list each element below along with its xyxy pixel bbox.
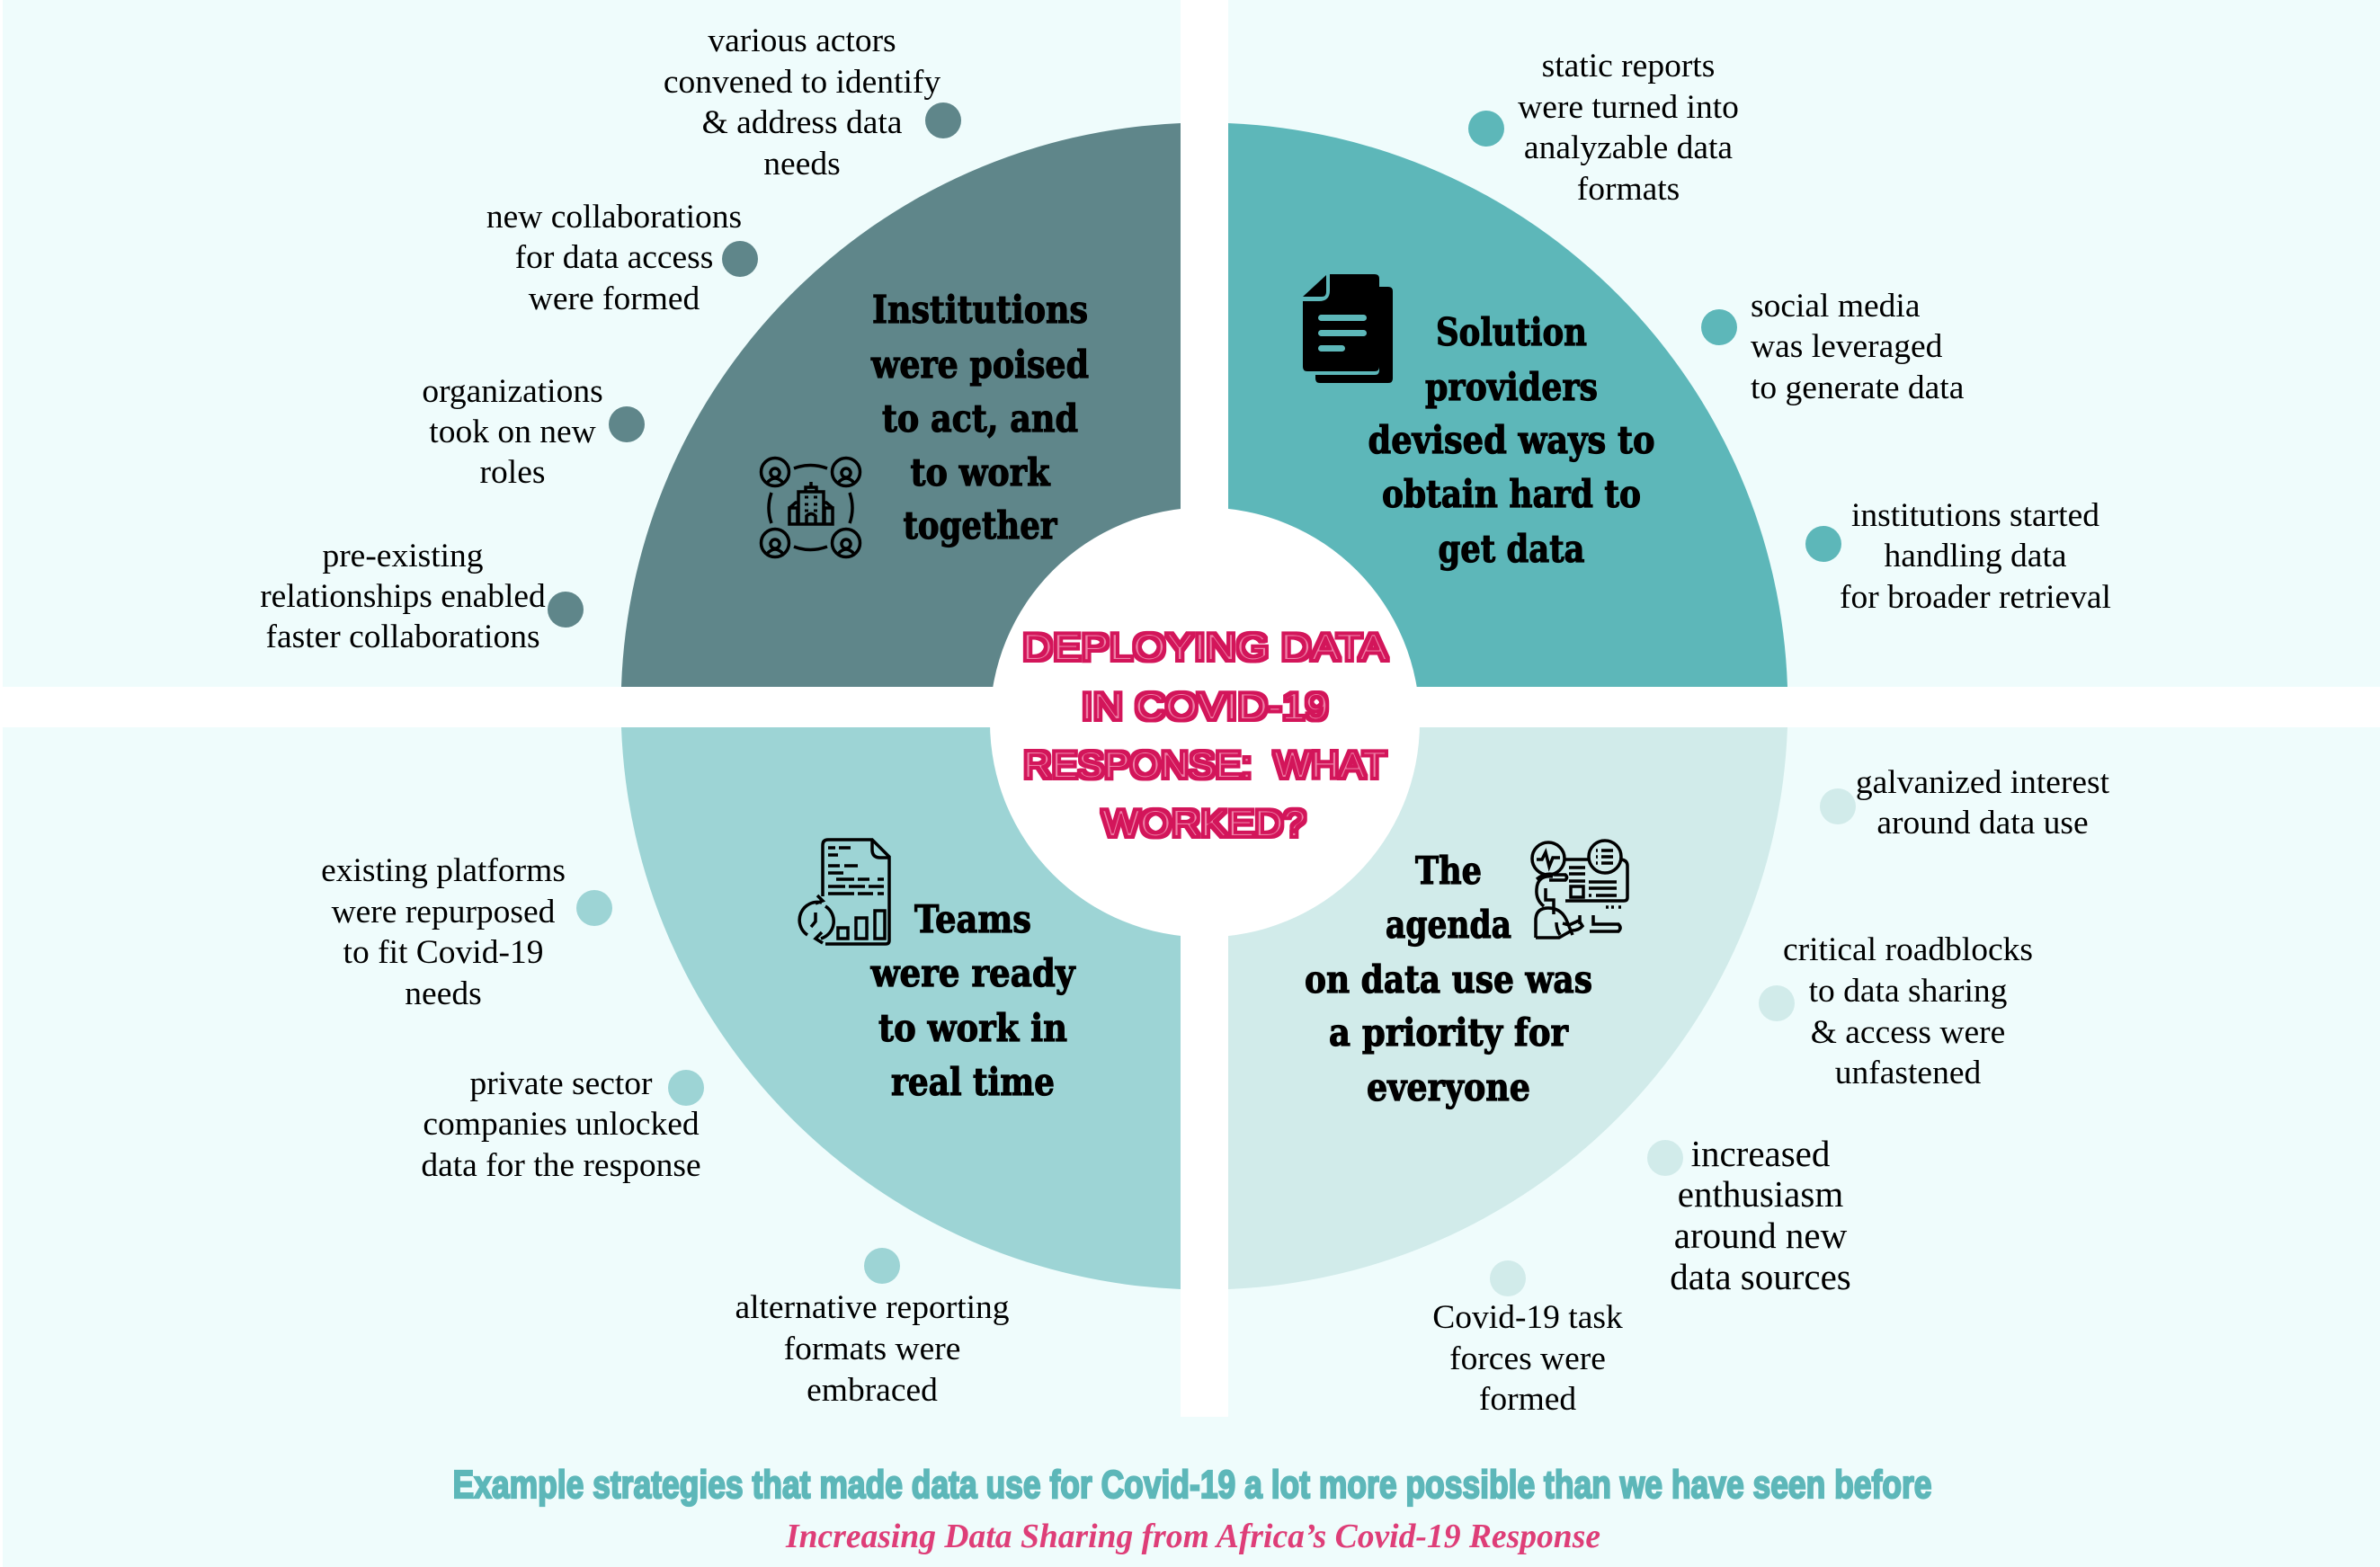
item: pre-existing relationships: pre-existing: [322, 538, 484, 574]
item: social media: social media: [1751, 288, 1921, 325]
heading: solution providers: providers: [1425, 365, 1598, 409]
heading: agenda: a priority for: [1329, 1011, 1569, 1055]
item: alternative reporting: formats were: [784, 1331, 960, 1367]
item: static reports: analyzable data: [1524, 129, 1733, 166]
item: existing platforms: existing platforms: [321, 852, 566, 889]
item: increased enthusiasm: around new: [1674, 1215, 1848, 1256]
item: pre-existing relationships: relationships enabled: [260, 578, 546, 615]
item: increased enthusiasm: data sources: [1670, 1256, 1851, 1297]
item: galvanized interest: around data use: [1876, 805, 2089, 841]
item: existing platforms: were repurposed: [332, 894, 556, 930]
item: existing platforms: needs: [405, 975, 482, 1012]
heading: solution providers: [1368, 310, 1654, 571]
heading: institutions: Institutions: [872, 288, 1088, 332]
title: WORKED?: [1102, 802, 1306, 844]
wedge: agenda: [1228, 727, 1787, 1289]
wedge: institutions: [621, 123, 1181, 687]
wedge: teams: [621, 727, 1181, 1289]
panel: solution providers quadrant: [1228, 0, 2380, 687]
heading: teams: were ready: [870, 951, 1076, 995]
item: organizations: organizations: [422, 373, 603, 410]
item: institutions started: [1805, 497, 2111, 616]
heading: agenda: The: [1415, 849, 1482, 893]
item: organizations: took on new: [429, 414, 596, 450]
item: static reports: [1468, 48, 1739, 208]
item: existing platforms: to fit Covid-19: [343, 934, 543, 971]
title: IN COVID-19: [1081, 685, 1329, 727]
heading: agenda: on data use was: [1305, 957, 1592, 1002]
item: static reports: static reports: [1542, 48, 1715, 85]
item: various actors: various actors: [708, 22, 896, 59]
item: critical roadblocks: critical roadblocks: [1783, 931, 2033, 968]
item: various actors: needs: [763, 146, 841, 183]
item: static reports: formats: [1577, 171, 1680, 208]
item: galvanized interest: galvanized interest: [1856, 764, 2110, 801]
icon: report with refresh arrows and bars: [799, 840, 889, 944]
item: private sector: [421, 1065, 704, 1184]
item: new collaborations: were formed: [529, 280, 700, 317]
footer headline: Example strategies that made data use for Covid-19 a lot more possible than we have seen before: [453, 1463, 1931, 1507]
heading: institutions: together: [903, 503, 1057, 548]
item: institutions started: institutions started: [1851, 497, 2099, 534]
item: various actors: convened to identify: [664, 64, 940, 101]
item: institutions started: handling data: [1884, 538, 2067, 574]
item: increased enthusiasm: enthusiasm: [1678, 1173, 1843, 1215]
panel: teams quadrant: [3, 727, 1181, 1567]
item: new collaborations: [486, 199, 758, 317]
heading: agenda: [1305, 849, 1592, 1109]
item: existing platforms: [321, 852, 612, 1012]
heading: institutions: [870, 288, 1089, 548]
heading: teams: to work in: [878, 1006, 1067, 1050]
title: DEPLOYING DATA: [1022, 626, 1387, 668]
item: alternative reporting: alternative reporting: [735, 1289, 1010, 1326]
icon: documents: [1303, 274, 1393, 383]
item: task forces: Covid-19 task: [1432, 1299, 1623, 1336]
footer: [453, 1417, 1931, 1567]
item: critical roadblocks: to data sharing: [1809, 973, 2008, 1010]
item: new collaborations: for data access: [515, 239, 713, 276]
heading: agenda: agenda: [1386, 903, 1511, 947]
heading: teams: real time: [891, 1060, 1055, 1104]
item: organizations: [422, 373, 645, 491]
item: alternative reporting: [735, 1248, 1010, 1409]
heading: solution providers: obtain hard to: [1382, 472, 1641, 516]
wedge: solution providers: [1228, 123, 1787, 687]
item: various actors: & address data: [702, 104, 903, 141]
icon: person at monitor: [1532, 841, 1627, 938]
item: various actors: [664, 22, 961, 183]
heading: solution providers: Solution: [1436, 310, 1587, 354]
title: [1022, 626, 1387, 844]
item: task forces: formed: [1479, 1381, 1576, 1418]
item: new collaborations: new collaborations: [486, 199, 742, 236]
item: task forces: forces were: [1449, 1340, 1606, 1377]
heading: institutions: to act, and: [882, 396, 1078, 441]
item: social media: was leveraged: [1751, 328, 1943, 365]
footer source: Increasing Data Sharing from Africa’s Covid-19 Response: [785, 1518, 1600, 1555]
heading: teams: Teams: [914, 897, 1031, 941]
item: alternative reporting: embraced: [807, 1372, 938, 1409]
item: social media: to generate data: [1751, 369, 1965, 406]
icon: connected people around building: [761, 459, 860, 557]
heading: solution providers: devised ways to: [1368, 418, 1654, 462]
item: critical roadblocks: unfastened: [1835, 1055, 1981, 1091]
item: critical roadblocks: & access were: [1811, 1014, 2005, 1051]
item: increased enthusiasm: [1647, 1133, 1851, 1297]
heading: institutions: were poised: [870, 343, 1089, 387]
item: private sector: private sector: [469, 1065, 653, 1102]
item: pre-existing relationships: faster collaborations: [265, 619, 540, 655]
panel: agenda quadrant: [1228, 727, 2380, 1567]
heading: solution providers: get data: [1439, 527, 1584, 571]
item: organizations: roles: [480, 454, 545, 491]
item: institutions started: for broader retrieval: [1840, 579, 2111, 616]
heading: agenda: everyone: [1367, 1065, 1530, 1109]
title: RESPONSE: WHAT: [1023, 743, 1386, 786]
item: increased enthusiasm: increased: [1691, 1133, 1830, 1174]
item: social media: [1701, 288, 1965, 406]
item: pre-existing relationships: [260, 538, 584, 655]
item: task forces: [1432, 1260, 1623, 1418]
center circle: [990, 507, 1420, 937]
item: private sector: companies unlocked: [423, 1106, 700, 1143]
heading: teams: [870, 897, 1076, 1104]
item: critical roadblocks: [1759, 931, 2033, 1091]
item: static reports: were turned into: [1518, 89, 1739, 126]
item: galvanized interest: [1820, 764, 2110, 841]
item: private sector: data for the response: [421, 1147, 701, 1184]
heading: institutions: to work: [910, 450, 1050, 494]
panel: institutions quadrant: [3, 0, 1181, 687]
